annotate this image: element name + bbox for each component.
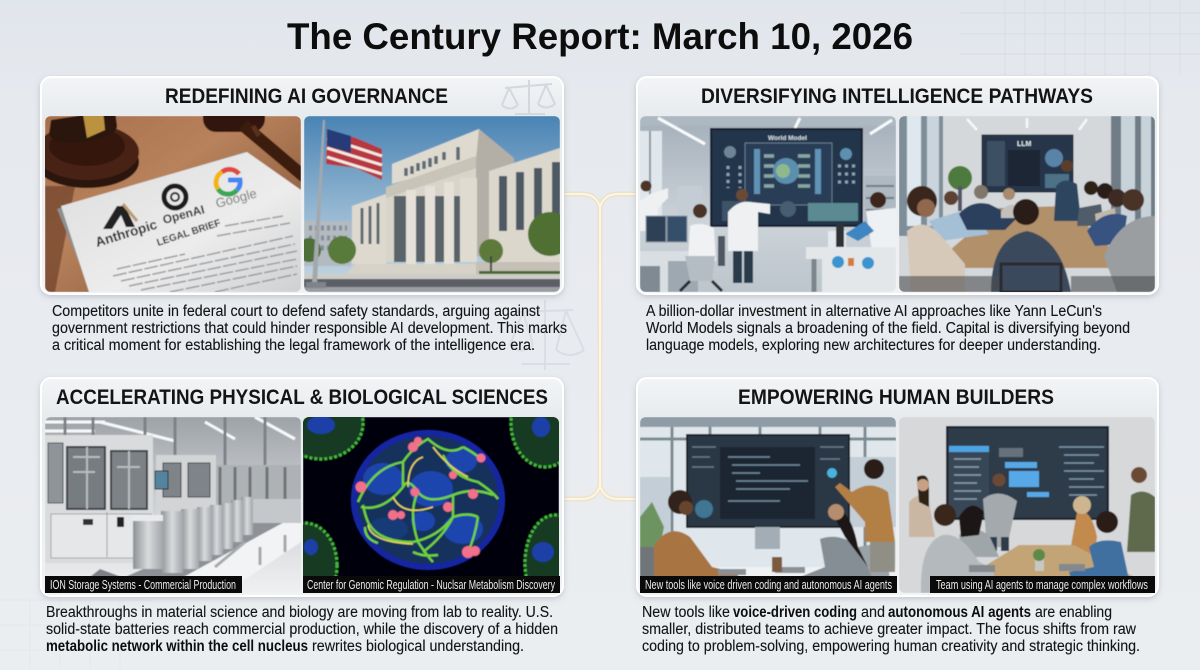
person: man left xyxy=(921,535,994,593)
body text: builders: are enabling xyxy=(1035,604,1112,621)
icon: faint scales xyxy=(502,80,555,114)
people: right side xyxy=(1077,181,1155,292)
person: left scientists xyxy=(640,188,668,231)
image: gavel and legal brief: OpenAI xyxy=(161,202,206,227)
person: presenter xyxy=(1054,180,1081,221)
person: man right xyxy=(1068,540,1129,576)
body text: builders: voice-driven coding xyxy=(733,604,857,621)
panel: physical and biological sciences xyxy=(41,378,585,611)
title: The Century Report: March 10, 2026 xyxy=(287,16,913,57)
image: battery factory xyxy=(45,417,301,593)
image: world model lab xyxy=(640,116,896,292)
person: woman right xyxy=(800,537,872,577)
heading: ACCELERATING PHYSICAL & BIOLOGICAL SCIENCES xyxy=(56,386,548,409)
image: voice-driven coding xyxy=(640,417,897,593)
caption: Center for Genomic Regulation - Nuclsar Metabolism Discovery xyxy=(307,578,556,592)
body text: governance: Competitors unite in federal court to defend safety standards, arguing against xyxy=(52,303,541,320)
icon: faint scales behind text xyxy=(510,300,584,370)
body text: builders: autonomous AI agents xyxy=(888,604,1031,621)
caption xyxy=(930,576,1155,593)
panel: diversifying intelligence pathways xyxy=(637,77,1158,294)
image: gavel and legal brief: Anthropic xyxy=(93,217,159,250)
panel: redefining AI governance xyxy=(35,77,572,294)
table xyxy=(986,544,1133,576)
panel: empowering human builders xyxy=(637,378,1158,596)
heading: DIVERSIFYING INTELLIGENCE PATHWAYS xyxy=(701,85,1093,108)
image: gavel and legal brief xyxy=(45,116,301,292)
caption xyxy=(45,576,242,593)
body text: governance: a critical moment for establishing the legal framework of the intelligence era. xyxy=(52,337,535,354)
caption: New tools like voice driven coding and autonomous AI agents xyxy=(645,578,892,592)
image: gavel and legal brief: LEGAL BRIEF xyxy=(156,218,222,249)
image: LLM conference room xyxy=(899,116,1155,292)
person: microscope scientist xyxy=(866,208,896,251)
caption: ION Storage Systems - Commercial Production xyxy=(50,578,236,592)
image: gavel and legal brief: Google xyxy=(214,186,258,211)
body text: pathways: A billion-dollar investment in alternative AI approaches like Yann LeCun's xyxy=(646,303,1102,320)
body text: pathways xyxy=(646,303,1130,354)
person: back of man xyxy=(991,231,1071,292)
body text: builders: coding to problem-solving, empowering human creativity and strategic thinking. xyxy=(642,638,1140,655)
caption xyxy=(303,576,560,593)
image: world model lab: World Model xyxy=(768,135,807,142)
body text: pathways: World Models signals a broadening of the field. Capital is diversifying beyond xyxy=(646,320,1130,337)
person: man left xyxy=(654,530,738,576)
body text: sciences xyxy=(46,604,558,655)
body text: builders xyxy=(642,604,1140,655)
person: standing scientist xyxy=(728,202,770,251)
body text: builders: New tools like xyxy=(642,604,730,621)
nucleus xyxy=(351,430,505,570)
corner cells xyxy=(303,417,559,576)
person: man standing xyxy=(835,483,895,542)
image: LLM conference room: LLM xyxy=(1017,141,1032,148)
body text: sciences: Breakthroughs in material science and biology are moving from lab to reality. U.S. xyxy=(46,604,553,621)
body text: sciences: solid-state batteries reach commercial production, while the discovery of a hidden xyxy=(46,621,558,638)
body text: builders: and xyxy=(861,604,885,621)
body text: sciences: metabolic network within the cell nucleus xyxy=(46,638,308,655)
body text: pathways: language models, exploring new architectures for deeper understanding. xyxy=(646,337,1101,354)
heading: EMPOWERING HUMAN BUILDERS xyxy=(738,386,1054,409)
body text: sciences: rewrites biological understanding. xyxy=(312,638,524,655)
body text: governance xyxy=(52,303,567,354)
table xyxy=(952,206,1109,268)
person: woman foreground xyxy=(907,225,965,292)
caption xyxy=(640,576,897,593)
people: far side xyxy=(929,184,1016,241)
people: group xyxy=(909,467,1155,557)
heading: REDEFINING AI GOVERNANCE xyxy=(165,85,448,108)
image: courthouse with flag xyxy=(297,116,572,292)
image: team using agents xyxy=(899,417,1155,593)
body text: builders: smaller, distributed teams to achieve greater impact. The focus shifts from raw xyxy=(642,621,1137,638)
image: cell nucleus micrograph xyxy=(303,417,560,593)
connector lines xyxy=(564,194,636,499)
body text: governance: government restrictions that could hinder responsible AI development. This marks xyxy=(52,320,567,337)
